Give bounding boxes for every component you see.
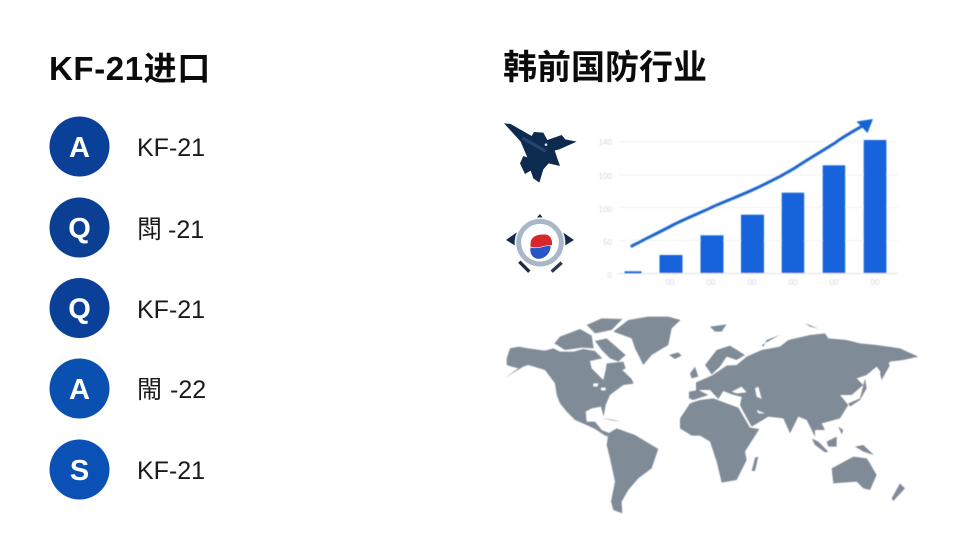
icon: fighter jet [504, 123, 577, 183]
list row: Q 閗-21: Q [68, 213, 91, 245]
list row: S KF-21: KF-21 [137, 457, 205, 485]
x axis labels [666, 278, 880, 287]
x axis labels: 00 [748, 278, 757, 287]
chart grid lines [618, 142, 898, 274]
world map [505, 317, 918, 513]
list row: A 閙-22: A [69, 374, 90, 406]
y axis labels: 100 [599, 172, 613, 181]
map: Eurasia, Africa and Oceania [680, 323, 918, 501]
panel: KF-21 import list [49, 50, 211, 500]
y axis labels: 0 [608, 271, 613, 280]
list row: A KF-21: A [69, 132, 90, 164]
x axis labels: 00 [830, 278, 839, 287]
list row: A 閙-22 [50, 358, 206, 418]
list row: A 閙-22: 閙 -22 [137, 376, 206, 404]
list row: Q 閗-21 [50, 198, 204, 258]
y axis labels [599, 138, 613, 280]
list row: Q KF-21: KF-21 [137, 296, 205, 324]
y axis labels: 100 [599, 205, 613, 214]
heading: Korean defense industry: 韩前国防行业 [503, 49, 707, 87]
list row: Q KF-21: Q [68, 294, 91, 326]
y axis labels: 140 [599, 138, 613, 147]
list row: A KF-21: KF-21 [137, 134, 205, 162]
x axis labels: 00 [666, 278, 675, 287]
map: Americas and Greenland [505, 317, 682, 513]
list row: S KF-21: S [70, 455, 89, 487]
list row: S KF-21 [50, 440, 205, 500]
icon: Korean emblem [506, 214, 574, 272]
heading: KF-21 import: KF-21进口 [49, 50, 211, 87]
list row: A KF-21 [50, 116, 205, 176]
list row: Q KF-21 [50, 278, 205, 338]
x axis labels: 00 [789, 278, 798, 287]
x axis labels: 00 [871, 278, 880, 287]
y axis labels: 50 [603, 238, 613, 247]
x axis labels: 00 [707, 278, 716, 287]
list row: Q 閗-21: 閗-21 [137, 216, 204, 244]
trend arrow [631, 119, 873, 247]
bars [624, 140, 886, 273]
bar chart: rising industry growth [599, 119, 898, 287]
